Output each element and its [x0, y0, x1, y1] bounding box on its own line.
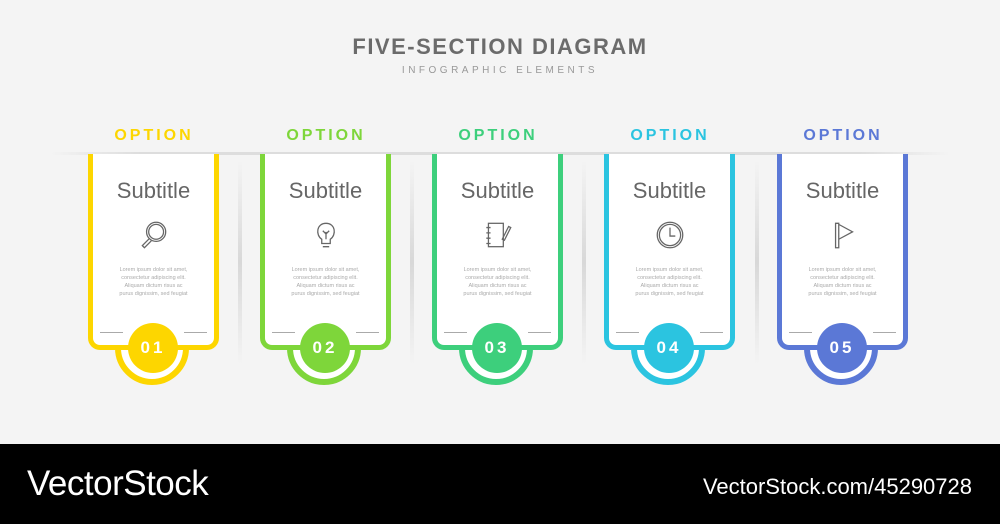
panel: option 1: Aliquam dictum risus ac [124, 283, 183, 289]
icon: clock [656, 222, 684, 248]
panel: option 5: consectetur adipiscing elit. [810, 275, 875, 281]
panel: option 3: Aliquam dictum risus ac [468, 283, 527, 289]
panel: option 4: Subtitle [633, 178, 706, 203]
panel: option 5: OPTION [803, 127, 883, 144]
subtitle: INFOGRAPHIC ELEMENTS [402, 65, 598, 76]
panel: option 5: Subtitle [806, 178, 879, 203]
panel: option 2: OPTION [286, 127, 366, 144]
panel: option 4: Lorem ipsum dolor sit amet, [636, 267, 703, 273]
panel: option 5: 05 [830, 338, 854, 357]
panel: option 3 [432, 127, 563, 385]
icon: flag [834, 222, 854, 248]
panel: option 4: purus dignissim, sed feugiat [635, 291, 704, 297]
icon: notebook [486, 222, 512, 248]
panel: option 1 [88, 127, 219, 385]
panel: option 2: Aliquam dictum risus ac [296, 283, 355, 289]
panel: option 1: OPTION [114, 127, 194, 144]
panel: option 2: consectetur adipiscing elit. [293, 275, 358, 281]
panel: option 1: 01 [141, 338, 165, 357]
panel: option 4: OPTION [630, 127, 710, 144]
panel: option 2: 02 [313, 338, 337, 357]
panel: option 3: consectetur adipiscing elit. [465, 275, 530, 281]
panel: option 3: Subtitle [461, 178, 534, 203]
panel: option 3: Lorem ipsum dolor sit amet, [464, 267, 531, 273]
panel: option 5: purus dignissim, sed feugiat [808, 291, 877, 297]
panel: option 5: Lorem ipsum dolor sit amet, [809, 267, 876, 273]
panel: option 5 [777, 127, 908, 385]
panel: option 2: purus dignissim, sed feugiat [291, 291, 360, 297]
panel: option 3: 03 [485, 338, 509, 357]
panel: option 1: Subtitle [117, 178, 190, 203]
icon: magnifier [142, 222, 166, 249]
panel: option 3: purus dignissim, sed feugiat [463, 291, 532, 297]
panel: option 4 [604, 127, 735, 385]
panel: option 4: 04 [657, 338, 681, 357]
panel: option 1: consectetur adipiscing elit. [121, 275, 186, 281]
footer bar [0, 444, 1000, 524]
panel: option 2: Lorem ipsum dolor sit amet, [292, 267, 359, 273]
logo text: VectorStock [27, 464, 208, 503]
panel: option 2 [260, 127, 391, 385]
panel: option 1: Lorem ipsum dolor sit amet, [120, 267, 187, 273]
panel: option 4: Aliquam dictum risus ac [640, 283, 699, 289]
url text: VectorStock.com/45290728 [703, 474, 972, 499]
panel: option 5: Aliquam dictum risus ac [813, 283, 872, 289]
panel: option 1: purus dignissim, sed feugiat [119, 291, 188, 297]
panel: option 4: consectetur adipiscing elit. [637, 275, 702, 281]
panel: option 2: Subtitle [289, 178, 362, 203]
icon: bulb [317, 222, 335, 248]
title: FIVE-SECTION DIAGRAM [352, 34, 648, 59]
shelf line [50, 152, 950, 155]
panel: option 3: OPTION [458, 127, 538, 144]
